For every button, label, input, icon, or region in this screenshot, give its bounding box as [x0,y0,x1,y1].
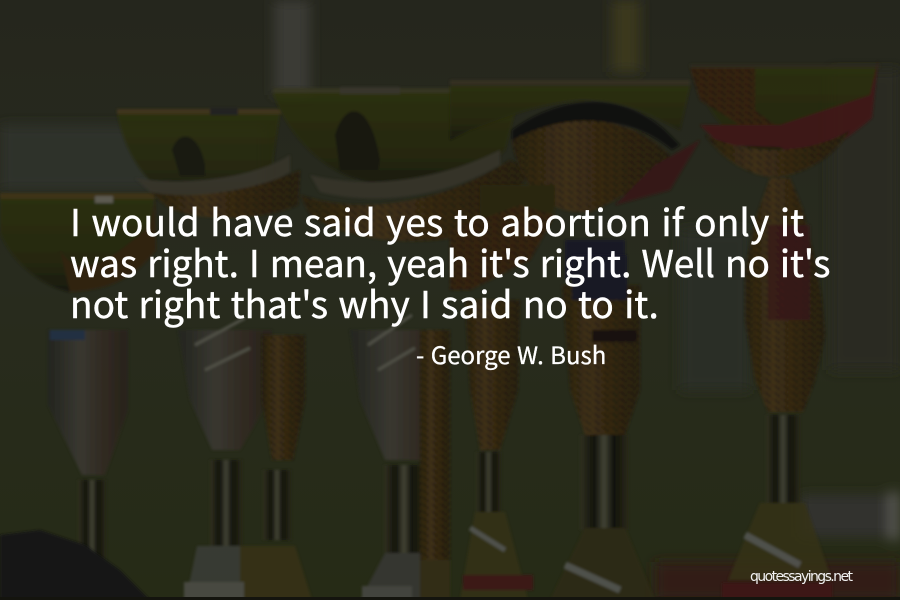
trophy far right [690,60,880,600]
lower centre trophies [460,255,655,600]
trophy gold cup centre right [450,80,700,290]
trophy second [117,108,312,600]
trophy silver centre [350,315,450,600]
trophy third cup [262,87,530,540]
cloth in lower left [0,530,150,600]
trophy far left [0,193,156,580]
attribution: - George W. Bush [416,336,606,371]
quote text: not right that's why I said no to it. [70,275,659,329]
quote text [70,193,830,329]
watermark: quotessayings.net [750,569,854,585]
quote text: I would have said yes to abortion if only it [70,193,804,247]
quote text: was right. I mean, yeah it's right. Well no it's [70,234,830,288]
